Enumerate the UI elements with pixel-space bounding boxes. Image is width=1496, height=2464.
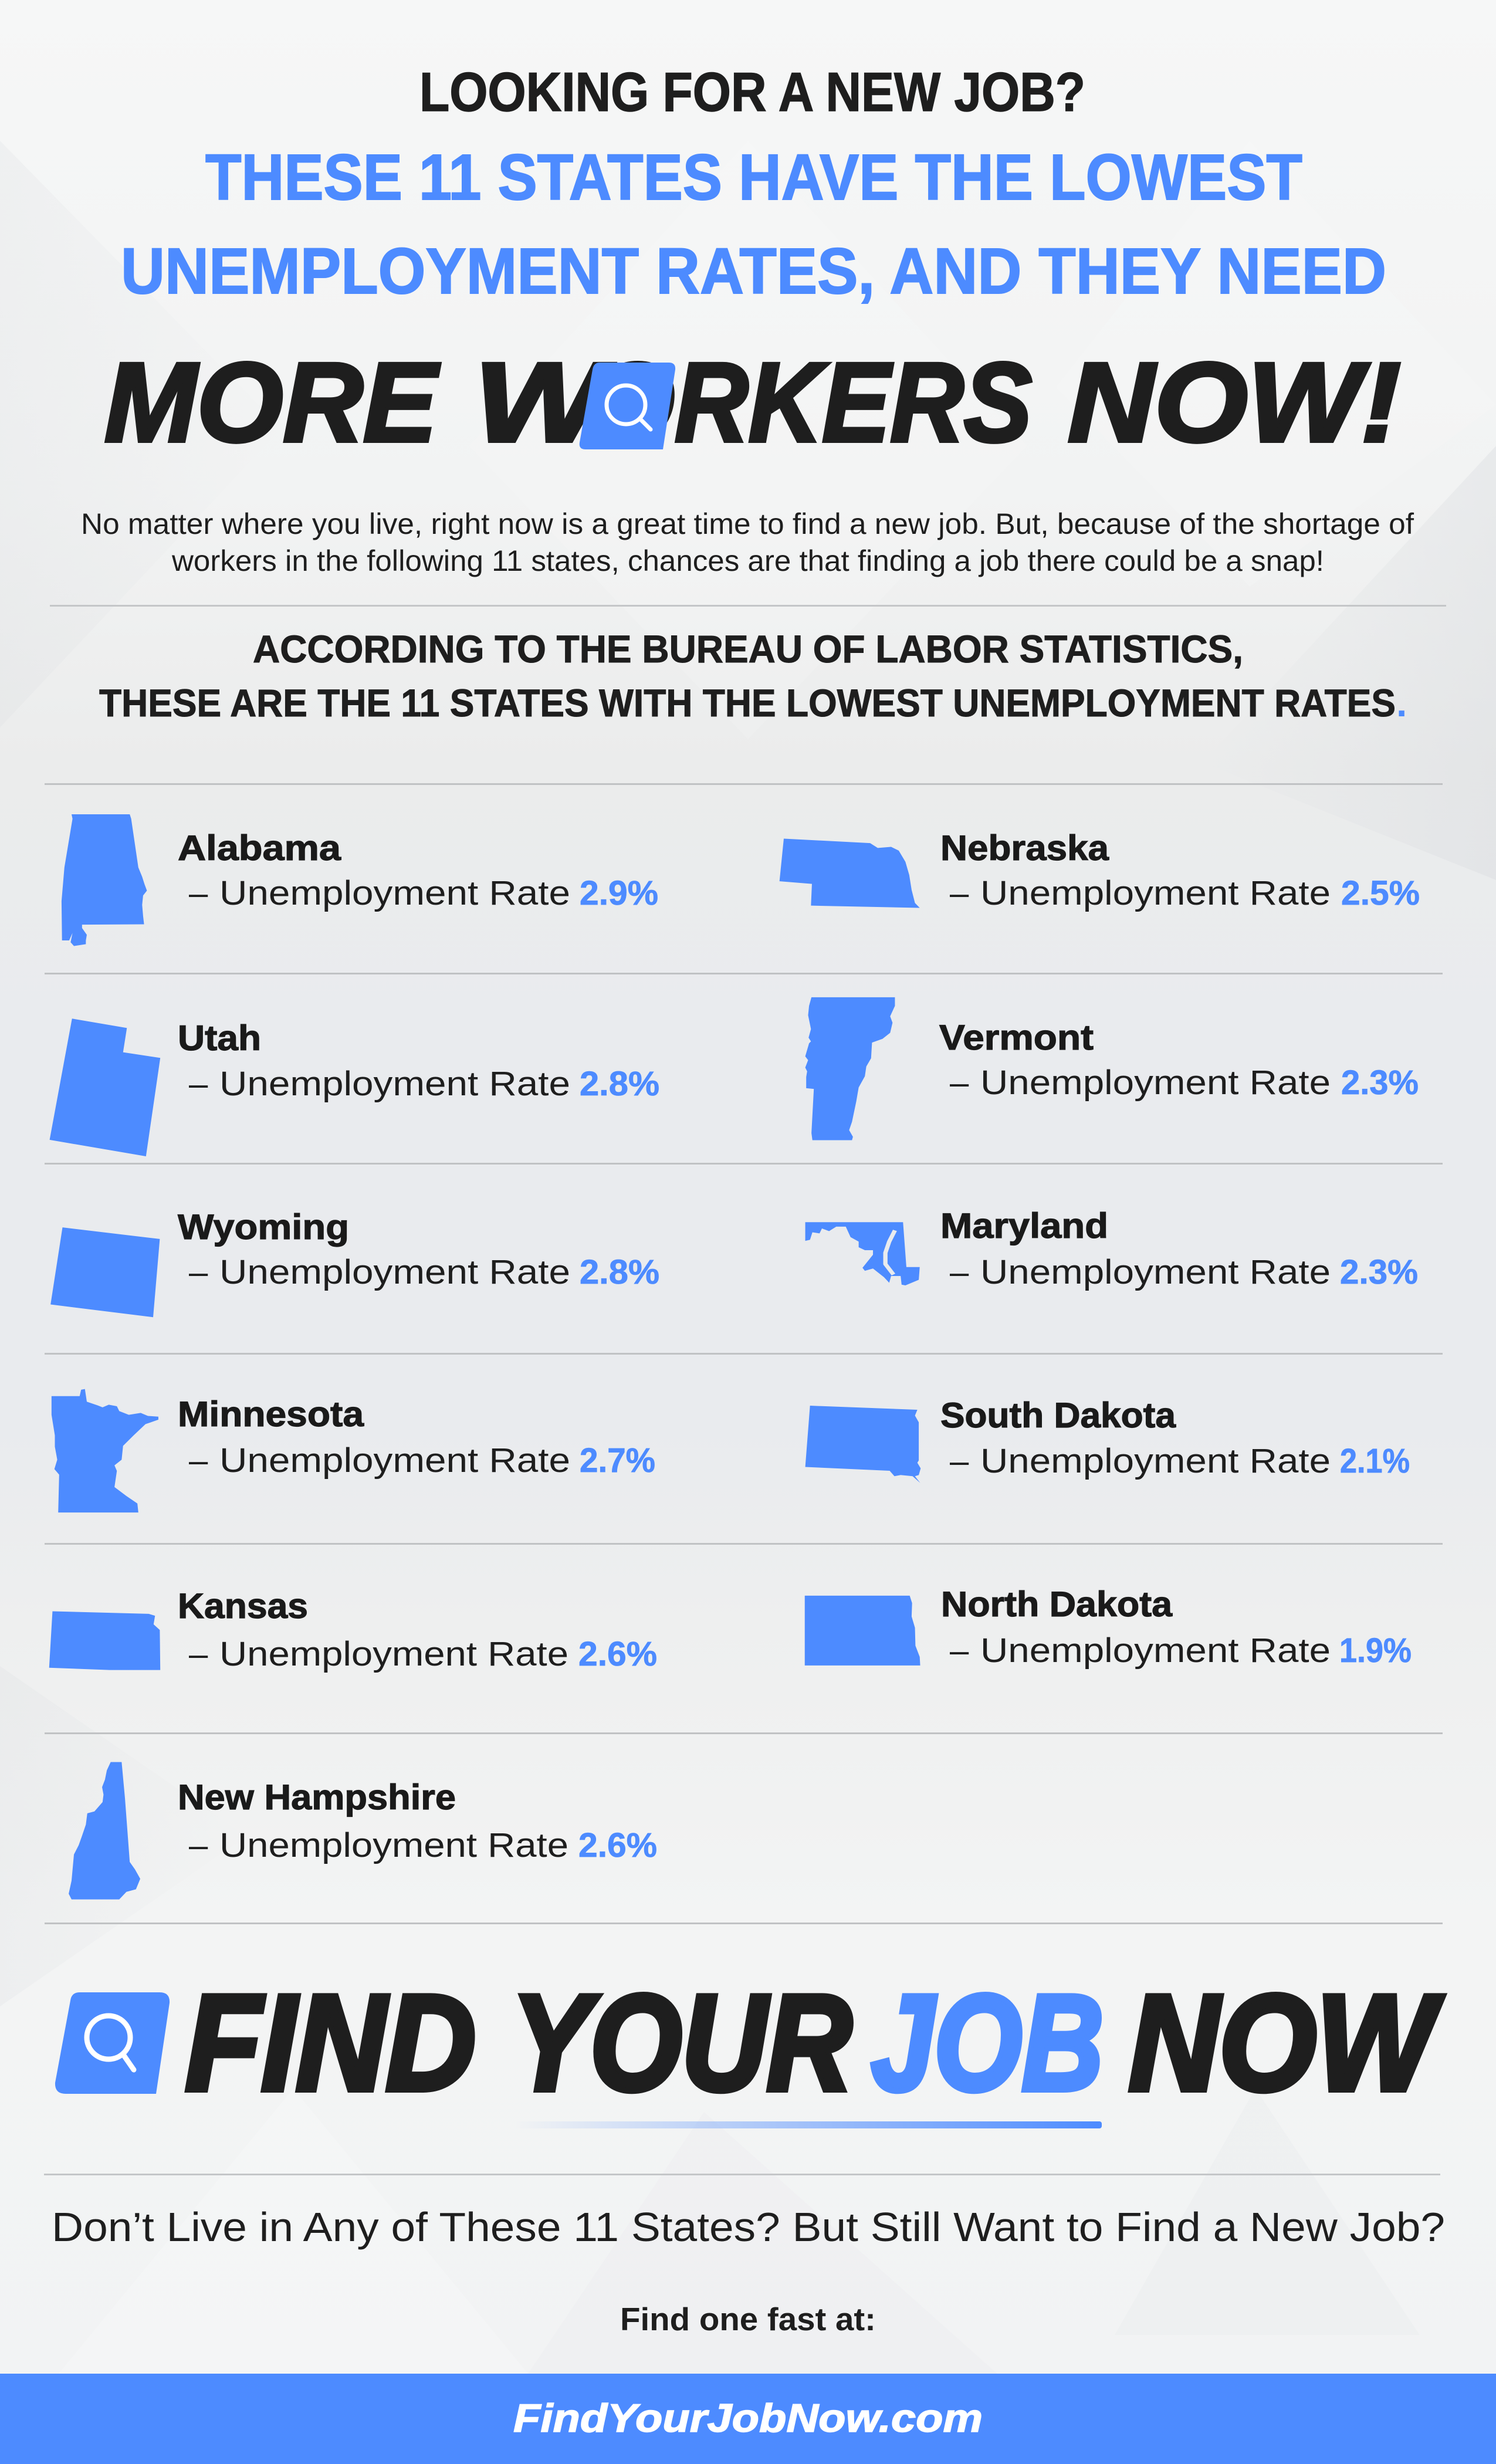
rate line: 2.6% xyxy=(578,1635,657,1673)
rate line: 2.6% xyxy=(578,1826,657,1864)
subheading: bureau of labor statistics xyxy=(99,627,1407,725)
rate line: – xyxy=(189,874,208,912)
icon: Maryland xyxy=(805,1222,920,1285)
rate line: 2.8% xyxy=(580,1065,659,1103)
heading: more workers now xyxy=(104,339,1401,465)
icon: Utah xyxy=(50,1018,160,1156)
rate line xyxy=(189,1065,659,1103)
wordmark: FIND xyxy=(185,1967,476,2119)
rate line: 2.1% xyxy=(1340,1442,1410,1480)
heading: more workers now: W xyxy=(474,339,614,465)
rate line: – xyxy=(189,1253,208,1291)
state name: New Hampshire xyxy=(178,1778,456,1817)
heading: blue headline: THESE 11 STATES HAVE THE LOWEST xyxy=(205,141,1302,214)
rate line: – xyxy=(189,1065,208,1103)
rate line xyxy=(950,1064,1419,1102)
title: looking for a new job: LOOKING FOR A NEW JOB? xyxy=(419,61,1085,123)
state name: Minnesota xyxy=(178,1395,364,1434)
icon: Nebraska xyxy=(780,838,920,908)
heading: more workers now: O xyxy=(587,339,675,465)
heading: blue headline: UNEMPLOYMENT RATES, AND THEY NEED xyxy=(121,235,1386,307)
subheading: bureau of labor statistics: THESE ARE THE 11 STATES WITH THE LOWEST UNEMPLOYMENT RATES xyxy=(99,681,1396,725)
rate line: Unemployment Rate xyxy=(980,1253,1331,1291)
rate line: – xyxy=(189,1635,208,1673)
website url: FindYourJobNow.com xyxy=(513,2396,983,2441)
rate line xyxy=(189,1635,657,1673)
rate line xyxy=(189,874,658,912)
panel: Nebraska xyxy=(780,828,1420,912)
state name: North Dakota xyxy=(941,1585,1173,1624)
rate line: – xyxy=(950,1253,969,1291)
panel: Alabama xyxy=(62,814,658,946)
rate line: – xyxy=(950,1064,969,1102)
rate line xyxy=(189,1441,655,1480)
rate line: – xyxy=(950,1632,969,1670)
panel: Vermont xyxy=(805,997,1419,1140)
icon: North Dakota xyxy=(805,1596,920,1666)
state name: Wyoming xyxy=(178,1207,349,1247)
rate line: Unemployment Rate xyxy=(980,1442,1331,1480)
state name: South Dakota xyxy=(940,1396,1176,1435)
logo: find your job now xyxy=(55,1967,1444,2128)
panel: South Dakota xyxy=(805,1396,1410,1483)
rate line: Unemployment Rate xyxy=(980,1632,1331,1670)
rate line: – xyxy=(950,874,969,912)
rate line: Unemployment Rate xyxy=(219,1441,570,1480)
icon: magnifier badge xyxy=(580,363,675,449)
call to action text: Find one fast at: xyxy=(620,2301,876,2337)
rate line: Unemployment Rate xyxy=(219,1253,570,1291)
intro paragraph: No matter where you live, right now is a great time to find a new job. But, because of the shortage of xyxy=(81,507,1414,540)
panel: North Dakota xyxy=(805,1585,1412,1670)
rate line: 2.3% xyxy=(1341,1064,1419,1102)
wordmark: NOW xyxy=(1129,1967,1444,2119)
heading: blue headline xyxy=(121,141,1386,307)
panel: Kansas xyxy=(49,1586,657,1673)
panel: New Hampshire xyxy=(69,1762,657,1900)
subheading: bureau of labor statistics: ACCORDING TO THE BUREAU OF LABOR STATISTICS, xyxy=(253,627,1243,671)
icon: Alabama xyxy=(62,814,147,946)
panel: Wyoming xyxy=(50,1207,659,1317)
panel: Maryland xyxy=(805,1206,1418,1291)
intro paragraph: workers in the following 11 states, chances are that finding a job there could be a snap! xyxy=(171,544,1324,577)
rate line: 2.5% xyxy=(1341,874,1420,912)
wordmark: YOUR xyxy=(512,1967,852,2119)
heading: more workers now: MORE xyxy=(104,339,440,465)
rate line: 2.7% xyxy=(580,1441,655,1480)
rate line: Unemployment Rate xyxy=(219,1635,568,1673)
icon: Vermont xyxy=(805,997,895,1140)
rate line: – xyxy=(189,1441,208,1480)
heading: more workers now: NOW! xyxy=(1068,339,1401,465)
icon: Minnesota xyxy=(52,1389,158,1512)
icon: South Dakota xyxy=(805,1406,920,1483)
underline xyxy=(515,2121,1102,2128)
rate line: – xyxy=(189,1826,208,1864)
state name: Nebraska xyxy=(940,828,1109,868)
rate line xyxy=(950,1442,1410,1480)
state name: Utah xyxy=(178,1018,261,1058)
question text: Don’t Live in Any of These 11 States? But Still Want to Find a New Job? xyxy=(52,2204,1445,2250)
rate line: 1.9% xyxy=(1339,1632,1412,1670)
rate line xyxy=(950,1253,1418,1291)
state name: Alabama xyxy=(178,828,341,868)
rate line xyxy=(950,1632,1412,1670)
rate line: Unemployment Rate xyxy=(219,874,570,912)
icon: Wyoming xyxy=(50,1227,160,1317)
footer bar xyxy=(0,2374,1496,2464)
subheading: bureau of labor statistics: . xyxy=(1396,681,1407,725)
rate line xyxy=(189,1253,659,1291)
rate line xyxy=(189,1826,657,1864)
rate line: Unemployment Rate xyxy=(219,1826,568,1864)
rate line: – xyxy=(950,1442,969,1480)
state name: Kansas xyxy=(178,1586,308,1626)
intro paragraph xyxy=(81,507,1414,577)
rate line: 2.8% xyxy=(580,1253,659,1291)
state name: Maryland xyxy=(940,1206,1108,1245)
panel: Utah xyxy=(50,1018,659,1156)
rate line: Unemployment Rate xyxy=(980,1064,1331,1102)
rate line: Unemployment Rate xyxy=(219,1065,570,1103)
icon: New Hampshire xyxy=(69,1762,140,1900)
rate line: Unemployment Rate xyxy=(980,874,1331,912)
rate line xyxy=(950,874,1420,912)
state name: Vermont xyxy=(939,1018,1094,1057)
wordmark: JOB xyxy=(871,1967,1104,2119)
rate line: 2.3% xyxy=(1340,1253,1418,1291)
icon: magnifier badge xyxy=(55,1992,170,2094)
icon: Kansas xyxy=(49,1611,160,1670)
panel: Minnesota xyxy=(52,1389,655,1512)
rate line: 2.9% xyxy=(580,874,658,912)
heading: more workers now: RKERS xyxy=(675,339,1032,465)
